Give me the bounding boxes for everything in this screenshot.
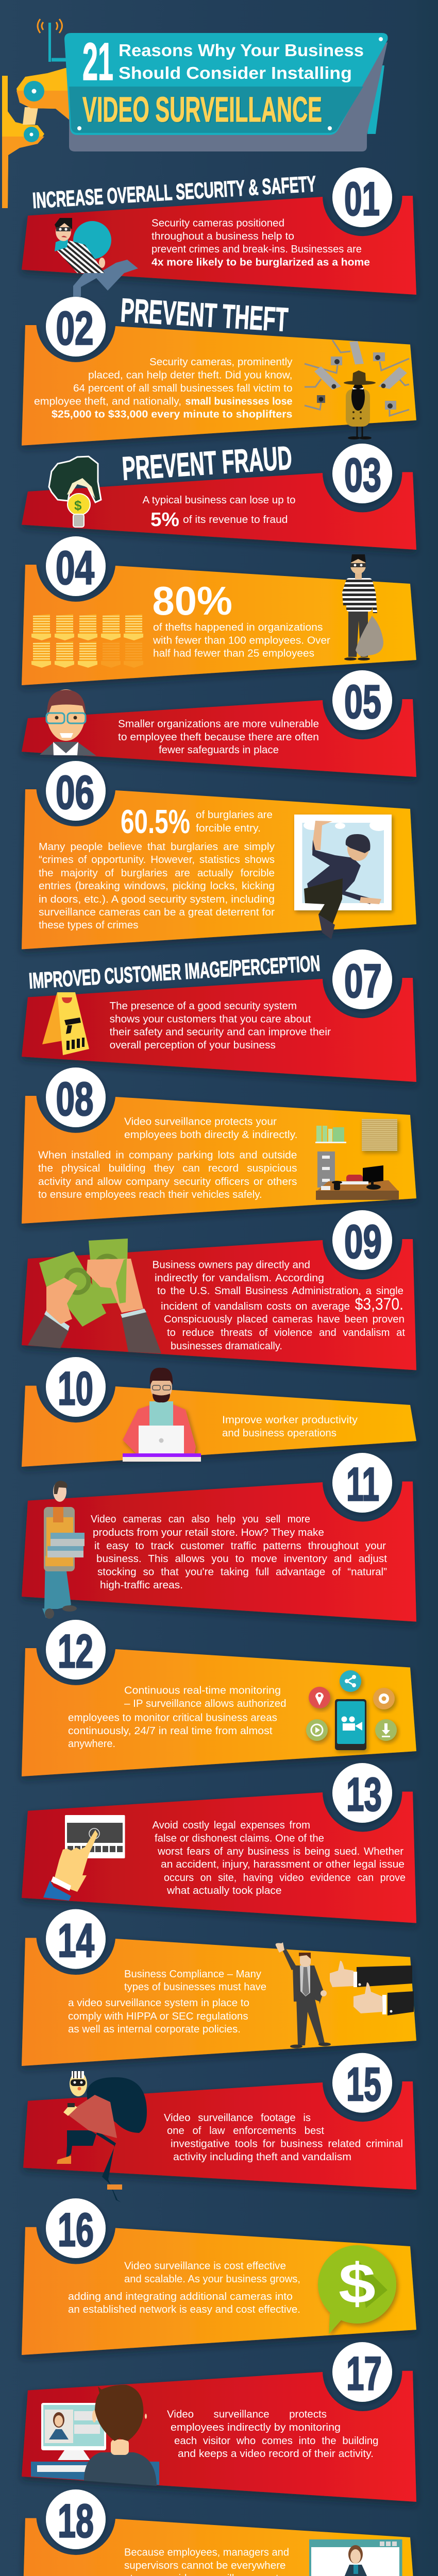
- icon: hand pressing video player: [43, 1815, 125, 1901]
- body text: When installed in company parking lots and outside: [38, 1150, 297, 1161]
- number badge 15: [332, 2053, 392, 2113]
- number badge 18: 18: [58, 2495, 94, 2547]
- body text: entries (breaking windows, picking locks, kicking: [39, 880, 275, 892]
- body text: types of businesses must have: [124, 1981, 266, 1993]
- panel shape: [22, 1792, 416, 1923]
- icon: standing thief with bag: [342, 554, 383, 660]
- number badge 18: [46, 2489, 106, 2549]
- icon: businessman with raised fist: [276, 1942, 331, 2048]
- icon: worried man with glasses: [40, 689, 96, 756]
- number badge 11: 11: [346, 1458, 379, 1511]
- body text: 64 percent of all small businesses fall victim to: [73, 383, 293, 394]
- body text: Many people believe that burglaries are simply: [39, 841, 275, 853]
- body text: in doors, etc.). A good security system, including: [39, 894, 275, 905]
- camera mounting arm: [2, 68, 70, 208]
- body text: stocking so that you're taking full advantage of “natural”: [97, 1567, 387, 1578]
- body text: [153, 1820, 406, 1896]
- body text: [164, 2112, 403, 2163]
- panel 12: real-time monitoring: [22, 1620, 416, 1776]
- body text: – IP surveillance allows authorized: [124, 1698, 287, 1709]
- body text: one of law enforcements best: [167, 2125, 324, 2137]
- body text: of thefts happened in organizations: [153, 622, 323, 633]
- body text: Security cameras positioned: [151, 217, 284, 229]
- number badge 02: 02: [56, 302, 94, 354]
- body text: comply with HIPPA or SEC regulations: [68, 2011, 248, 2022]
- body text: [38, 1116, 298, 1200]
- body text: $25,000 to $33,000 every minute to shoplifters: [52, 409, 293, 420]
- panel 11: sell more products: [22, 1453, 416, 1622]
- body text: continuously, 24/7 in real time from almost: [68, 1725, 273, 1737]
- number badge 03: 03: [344, 449, 381, 502]
- number badge 13: [332, 1763, 392, 1823]
- number badge 16: 16: [58, 2204, 94, 2257]
- panel 15: law enforcement tool: [23, 2053, 416, 2202]
- number badge 12: 12: [58, 1625, 93, 1677]
- body text: businesses dramatically.: [171, 1341, 282, 1352]
- panel shape: [22, 699, 416, 777]
- number badge 01: 01: [344, 173, 380, 226]
- panel shape: [22, 2518, 416, 2576]
- body text: a video surveillance system in place to: [68, 1997, 249, 2009]
- body text: investigative tools for business related criminal: [171, 2138, 403, 2149]
- camera body: [64, 33, 388, 151]
- panel 09: vandalism costs: [22, 1210, 416, 1370]
- number badge 10: [46, 1357, 106, 1417]
- body text: Video surveillance protects: [167, 2409, 327, 2420]
- body text: [39, 809, 275, 931]
- body text: [151, 217, 370, 268]
- body text: these types of crimes: [39, 920, 138, 931]
- body text: [167, 2409, 378, 2460]
- panel shape: [22, 1386, 416, 1467]
- body text: indirectly for vandalism. According: [155, 1273, 324, 1284]
- body text: each visitor who comes into the building: [174, 2435, 378, 2447]
- icon: thief carrying teal sack: [55, 218, 138, 297]
- number badge 09: [332, 1210, 392, 1270]
- icon: gloved hand and dollar light bulb: $: [74, 498, 82, 513]
- body text: an established network is easy and cost effective.: [68, 2304, 300, 2315]
- body text: high-traffic areas.: [100, 1580, 183, 1591]
- number badge 14: 14: [58, 1914, 94, 1967]
- body text: what actually took place: [166, 1885, 281, 1896]
- panel 07: improved customer image: [22, 950, 416, 1082]
- body text: business. This allows you to move inventory and adjust: [96, 1553, 387, 1565]
- panel 17: protects employees indirectly: [22, 2342, 416, 2502]
- body text: Because employees, managers and: [124, 2547, 289, 2558]
- number badge 03: [332, 444, 392, 503]
- body text: half had fewer than 25 employees: [153, 648, 314, 659]
- body text: to the U.S. Small Business Administration, a single: [157, 1285, 403, 1297]
- icon: bearded man with laptop: [123, 1368, 201, 1462]
- icon: ten buildings, eight highlighted: [31, 614, 143, 668]
- body text: an accident, injury, harassment or other legal issue: [161, 1859, 405, 1870]
- panel shape: [22, 325, 416, 446]
- body text: [68, 1969, 266, 2035]
- number badge 10: 10: [58, 1362, 93, 1415]
- body text: Avoid costly legal expenses from: [153, 1820, 310, 1831]
- body text: Video surveillance is cost effective: [124, 2261, 286, 2272]
- body text: anywhere.: [68, 1738, 115, 1750]
- body text: it easy to track customer traffic patterns throughout your: [94, 1540, 386, 1552]
- body text: and scalable. As your business grows,: [124, 2274, 300, 2285]
- body text: [68, 2261, 300, 2315]
- number badge 16: [46, 2198, 106, 2258]
- body text: Continuous real-time monitoring: [124, 1685, 281, 1696]
- body text: [34, 357, 293, 420]
- icon: office with desk: [315, 1119, 399, 1200]
- body text: small businesses lose: [186, 396, 293, 407]
- body text: occurs on site, having video evidence can prove: [164, 1872, 406, 1884]
- body text: employees both directly & indirectly.: [124, 1129, 298, 1141]
- body text: the majority of burglaries are actually forcible: [39, 868, 275, 879]
- panel 14: business compliance: [22, 1909, 416, 2066]
- body text: [110, 1001, 331, 1051]
- body text: [91, 1514, 387, 1591]
- panel shape: [22, 472, 416, 550]
- icon: phone with app icons: [306, 1670, 397, 1750]
- title text: [82, 32, 364, 130]
- number badge 01: [332, 167, 392, 227]
- body text: Business Compliance – Many: [124, 1969, 261, 1980]
- number badge 07: 07: [344, 955, 382, 1008]
- number badge 13: 13: [346, 1768, 382, 1821]
- panel shape: [22, 1239, 416, 1370]
- body text: to employee theft because there are often: [118, 732, 319, 743]
- number badge 08: 08: [56, 1073, 94, 1125]
- body text: placed, can help deter theft. Did you know,: [88, 370, 293, 381]
- panel 04: thefts in small organizations: [22, 536, 416, 685]
- panel 18: monitors productivity: [22, 2489, 416, 2576]
- icon: signal waves and antenna: [38, 19, 66, 62]
- icon: surveillance cameras: [305, 340, 409, 416]
- title text: Should Consider Installing: [119, 64, 352, 83]
- icon: gloved hand and dollar light bulb: [49, 456, 101, 527]
- body text: $3,370.: [355, 1295, 403, 1313]
- panel shape: [22, 2227, 416, 2355]
- panel shape: [22, 1648, 416, 1776]
- body text: with fewer than 100 employees. Over: [153, 635, 330, 646]
- panel 03: prevent fraud: [22, 439, 416, 550]
- icon: video conference window: [309, 2539, 402, 2576]
- body text: [124, 2547, 293, 2576]
- body text: supervisors cannot be everywhere: [124, 2560, 285, 2571]
- panel shape: [22, 1938, 416, 2066]
- number badge 05: 05: [344, 676, 381, 728]
- body text: The presence of a good security system: [110, 1001, 297, 1012]
- icon: dollar speech bubble: [318, 2245, 396, 2334]
- body text: shows your customers that you care about: [110, 1014, 311, 1025]
- number badge 09: 09: [344, 1216, 382, 1268]
- body text: false or dishonest claims. One of the: [155, 1833, 324, 1844]
- title banner: security camera: [2, 19, 388, 208]
- body text: employees indirectly by monitoring: [171, 2422, 341, 2433]
- icon: spy in trench coat: [344, 370, 376, 439]
- icon: burglar with dark sack: [57, 2071, 147, 2202]
- panel shape: [22, 1482, 416, 1622]
- icon: camera warning sign: [42, 992, 89, 1055]
- body text: of its revenue to fraud: [183, 514, 288, 526]
- heading: PREVENT THEFT: [120, 291, 289, 338]
- body text: Security cameras, prominently: [149, 357, 293, 368]
- body text: worst fears of any business is being sued. Whether: [157, 1846, 403, 1857]
- body text: and keeps a video record of their activity.: [178, 2448, 374, 2460]
- body text: adding and integrating additional cameras into: [68, 2291, 293, 2302]
- body text: [222, 1415, 358, 1439]
- icon: hands counting money: [28, 1239, 161, 1353]
- panel shape: [22, 1096, 416, 1224]
- panel 13: avoid legal expenses: [22, 1763, 416, 1923]
- number badge 17: 17: [346, 2347, 382, 2400]
- body text: to reduce threats of violence and vandalism at: [167, 1327, 405, 1338]
- icon: shopkeeper carrying boxes: [42, 1481, 85, 1619]
- panel 08: protects employees: [22, 1067, 416, 1224]
- body text: forcible entry.: [196, 823, 261, 834]
- body text: [142, 495, 296, 531]
- icon: burglar climbing through window: [294, 815, 392, 939]
- panel 16: cost effective and scalable: [22, 2198, 416, 2355]
- number badge 15: 15: [346, 2058, 381, 2111]
- panel 10: worker productivity: [22, 1357, 416, 1467]
- body text: [68, 1685, 287, 1750]
- body text: of burglaries are: [196, 809, 273, 821]
- body text: A typical business can lose up to: [142, 495, 296, 506]
- title text: 21: [82, 32, 113, 91]
- number badge 11: [332, 1453, 392, 1513]
- body text: Video cameras can also help you sell more: [91, 1514, 310, 1525]
- body text: prevent crimes and break-ins. Businesses are: [151, 244, 362, 255]
- body text: activity and allow company security officers or others: [38, 1176, 297, 1188]
- panel shape: [22, 2371, 416, 2502]
- panel shape: [22, 978, 416, 1082]
- body text: surveillance cameras can be a great deterrent for: [39, 907, 275, 918]
- body text: to ensure employees reach their vehicles safely.: [38, 1189, 262, 1200]
- title text: Reasons Why Your Business: [119, 41, 364, 60]
- heading: PREVENT FRAUD: [121, 439, 293, 487]
- number badge 06: 06: [56, 767, 94, 819]
- body text: 4x more likely to be burglarized as a home: [151, 257, 370, 268]
- icon: dollar speech bubble: $: [339, 2252, 376, 2315]
- panel 02: prevent theft: [22, 291, 416, 446]
- body text: throughout a business help to: [151, 231, 294, 242]
- icon: two thumbs up hands: [330, 1961, 414, 2015]
- body text: the physical building they can record suspicious: [38, 1163, 297, 1174]
- statistic 80%: 80%: [153, 578, 232, 623]
- number badge 05: [332, 670, 392, 730]
- icon: person at monitor with video feed: [31, 2385, 159, 2486]
- body text: Improve worker productivity: [222, 1415, 358, 1426]
- body text: Smaller organizations are more vulnerable: [118, 719, 319, 730]
- body text: 5%: [150, 509, 179, 531]
- body text: activity including theft and vandalism: [173, 2151, 351, 2163]
- body text: products from your retail store. How? They make: [93, 1527, 324, 1538]
- panel shape: [22, 196, 416, 295]
- body text: employees to monitor critical business areas: [68, 1713, 277, 1724]
- panel 01: increase overall security and safety: [22, 167, 416, 297]
- number badge 14: [46, 1909, 106, 1969]
- panel shape: [22, 789, 416, 949]
- body text: incident of vandalism costs on average: [161, 1301, 350, 1312]
- panel 06: forcible entry burglaries: [22, 761, 416, 949]
- number badge 12: [46, 1620, 106, 1680]
- body text: employee theft, and nationally,: [34, 396, 181, 407]
- body text: as well as internal corporate policies.: [68, 2024, 241, 2035]
- statistic 60.5%: 60.5%: [121, 803, 190, 840]
- number badge 07: [332, 950, 392, 1009]
- body text: Conspicuously placed cameras have been proven: [164, 1314, 405, 1325]
- body text: overall perception of your business: [110, 1040, 276, 1051]
- body text: “crimes of opportunity. However, statistics shows: [39, 854, 275, 866]
- number badge 04: 04: [56, 542, 94, 595]
- body text: and business operations: [222, 1428, 336, 1439]
- body text: Video surveillance footage is: [164, 2112, 311, 2124]
- body text: fewer safeguards in place: [159, 744, 279, 756]
- panel shape: [22, 565, 416, 685]
- panel shape: [23, 2081, 416, 2190]
- body text: [153, 1260, 405, 1352]
- body text: Video surveillance protects your: [124, 1116, 277, 1128]
- body text: Business owners pay directly and: [153, 1260, 310, 1271]
- body text: [118, 719, 319, 756]
- body text: [153, 622, 330, 659]
- number badge 17: [332, 2342, 392, 2402]
- panel 05: smaller organizations: [22, 670, 416, 777]
- body text: their safety and security and can improve their: [110, 1027, 331, 1038]
